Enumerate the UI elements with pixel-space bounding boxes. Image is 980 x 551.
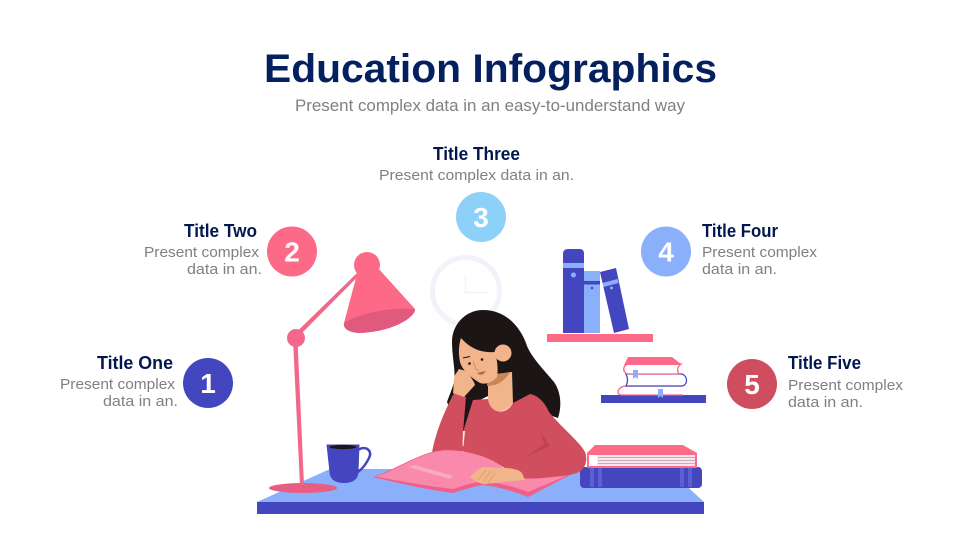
sweater	[432, 393, 586, 480]
item 1: Title One: data in an.	[103, 393, 178, 410]
item 3: Title Three	[379, 143, 574, 242]
hand on book	[470, 467, 525, 484]
hand on cheek	[453, 369, 475, 397]
item 4: Title Four: Present complex	[702, 244, 818, 261]
icon: desk lamp	[269, 252, 415, 493]
item 5: Title Five: data in an.	[788, 394, 863, 411]
icon: wall clock	[432, 258, 500, 324]
item 3: Title Three: 3	[473, 202, 489, 233]
item 2: Title Two: 2	[284, 236, 300, 268]
item 1: Title One: Present complex	[60, 376, 176, 393]
subtitle: Present complex data in an easy-to-understand way	[295, 96, 685, 115]
item 4: Title Four	[641, 220, 818, 278]
item 4: Title Four: data in an.	[702, 261, 777, 278]
item 5: Title Five: 5	[744, 369, 760, 400]
item 3: Title Three: Present complex data in an.	[379, 167, 574, 184]
item 2: Title Two	[144, 220, 317, 278]
item 5: Title Five	[727, 352, 904, 411]
item 1: Title One: 1	[200, 368, 216, 399]
girl reading at the desk	[373, 310, 586, 497]
icon: bookshelf with upright books	[547, 249, 653, 342]
item 2: Title Two: Title Two	[184, 220, 257, 241]
ear	[494, 344, 512, 362]
title: Education Infographics	[264, 47, 717, 91]
item 1: Title One: Title One	[97, 352, 173, 373]
icon: stacked books on desk	[580, 445, 702, 488]
icon: coffee mug	[326, 444, 370, 483]
hair strand highlight	[462, 431, 465, 446]
face	[459, 338, 498, 384]
item 1: Title One	[60, 352, 233, 410]
item 2: Title Two: data in an.	[187, 261, 262, 278]
item 4: Title Four: 4	[658, 236, 674, 268]
item 4: Title Four: Title Four	[702, 220, 778, 241]
open book	[373, 450, 570, 497]
hair	[447, 310, 560, 438]
item 2: Title Two: Present complex	[144, 244, 260, 261]
item 5: Title Five: Present complex	[788, 377, 904, 394]
icon: shelf with stacked books	[601, 357, 706, 403]
item 3: Title Three: Title Three	[433, 143, 520, 164]
eyes and mouth	[463, 356, 486, 375]
item 5: Title Five: Title Five	[788, 352, 861, 373]
neck	[488, 372, 513, 412]
sweater fold	[524, 433, 550, 458]
finger lines	[478, 470, 495, 483]
desk	[257, 469, 704, 514]
